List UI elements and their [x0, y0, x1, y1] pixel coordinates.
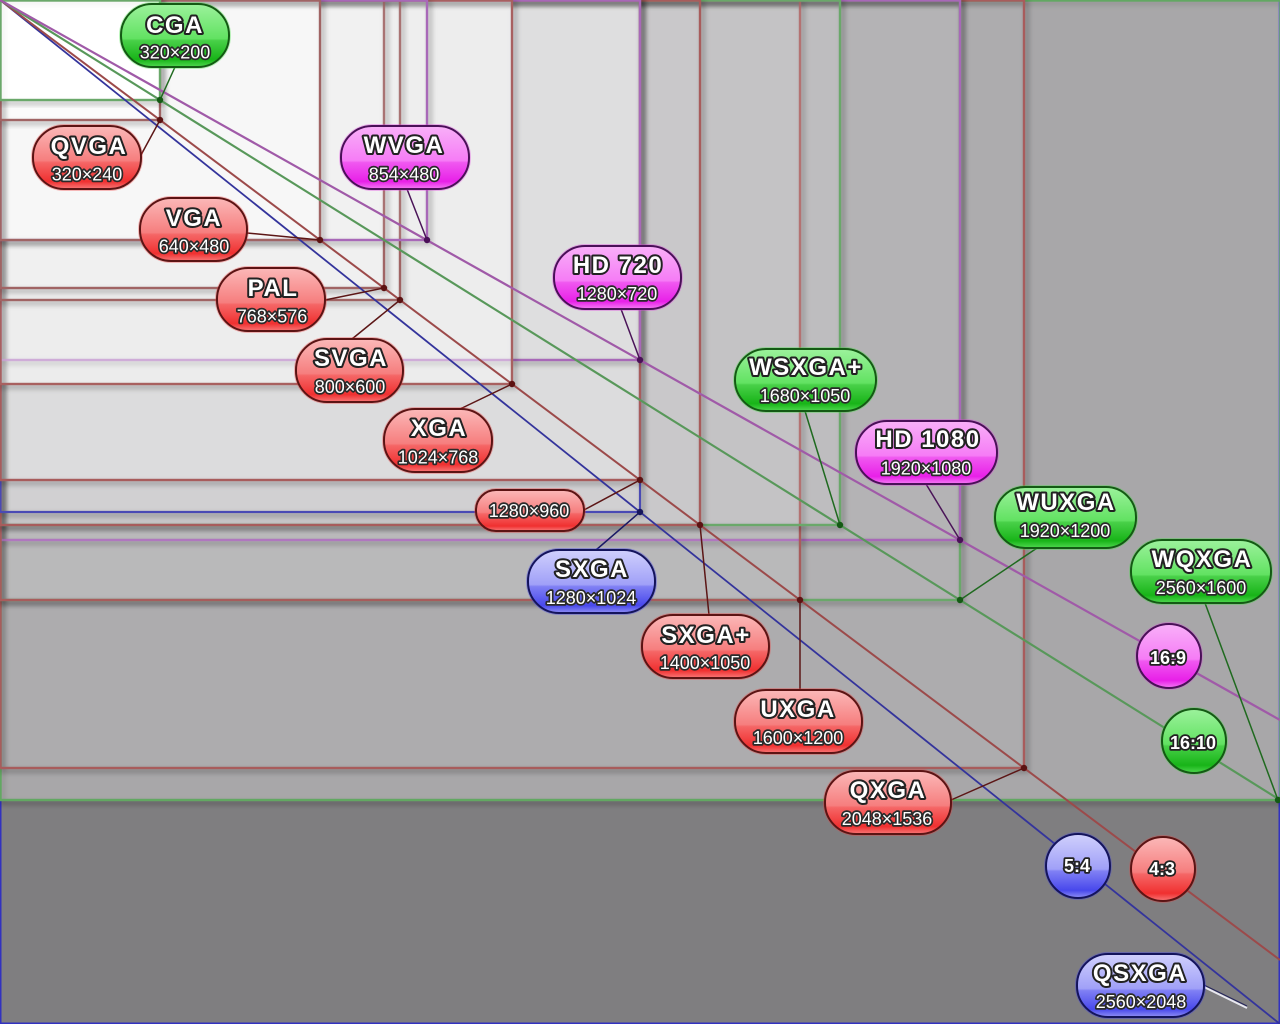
frame: WQXGA 2560×1600	[0, 0, 1280, 803]
frame: PAL 768×576	[0, 0, 387, 291]
label: HD 1080: 1920×1080	[881, 458, 971, 478]
leader: QVGA	[141, 117, 163, 155]
frame: QXGA 2048×1536	[0, 0, 1027, 771]
label: QVGA: 320×240	[52, 164, 122, 184]
leader: PAL	[325, 285, 387, 300]
label: SXGA: SXGA	[555, 556, 629, 583]
label: QVGA	[31, 124, 143, 191]
label: SXGA+	[640, 613, 771, 680]
label: UXGA: 1600×1200	[753, 728, 843, 748]
label: PAL	[215, 266, 327, 333]
label: WSXGA+: 1680×1050	[760, 386, 850, 406]
frame: VGA 640×480	[0, 0, 323, 243]
ratio badge: 16:10: 16:10	[1170, 733, 1216, 753]
label: UXGA: UXGA	[760, 696, 836, 723]
label: QXGA	[823, 769, 953, 836]
label: CGA: CGA	[146, 12, 204, 39]
label: CGA: 320×200	[140, 42, 210, 62]
leader: HD 1080	[926, 484, 963, 543]
label: SXGA	[526, 548, 657, 615]
label: HD 720: 1280×720	[577, 284, 657, 304]
leader: WSXGA+	[805, 411, 843, 528]
ratio badge: 4:3: 4:3	[1149, 859, 1175, 879]
label: QVGA: QVGA	[51, 133, 127, 160]
label: SVGA: 800×600	[315, 377, 385, 397]
ratio badge: 5:4: 5:4	[1064, 856, 1090, 876]
label: SVGA	[294, 337, 405, 404]
ratio badge: 16:9: 16:9	[1150, 648, 1186, 668]
ratio badge: 4:3	[1129, 835, 1197, 903]
label: 1280×960: 1280×960	[489, 501, 569, 521]
label: WVGA: WVGA	[364, 132, 444, 159]
frame: SXGA 1280×1024	[0, 0, 643, 515]
leader: SXGA+	[697, 522, 709, 615]
label: XGA	[382, 407, 494, 474]
label: UXGA	[733, 688, 864, 755]
leader: QSXGA	[1204, 985, 1247, 1008]
frame: WVGA 854×480	[0, 0, 430, 243]
label: HD 1080	[854, 419, 999, 486]
frame: WSXGA+ 1680×1050	[0, 0, 843, 528]
label: WUXGA: WUXGA	[1016, 489, 1116, 516]
label: VGA	[138, 196, 249, 263]
leader: CGA	[157, 67, 175, 103]
leader: WQXGA	[1205, 603, 1280, 803]
label: WQXGA: WQXGA	[1152, 546, 1252, 573]
label: SXGA+: SXGA+	[661, 622, 751, 649]
frame: WUXGA 1920×1200	[0, 0, 963, 603]
label: WSXGA+	[733, 347, 878, 413]
leader: QXGA	[951, 765, 1027, 800]
leader: SVGA	[352, 297, 403, 339]
label: VGA: VGA	[166, 205, 222, 232]
frame: SXGA+ 1400×1050	[0, 0, 703, 528]
frame: SVGA 800×600	[0, 0, 403, 303]
label: PAL: 768×576	[237, 306, 307, 326]
leader: HD 720	[621, 309, 643, 363]
frame: UXGA 1600×1200	[0, 0, 803, 603]
frame: HD 1080 1920×1080	[0, 0, 963, 543]
label: HD 1080: HD 1080	[875, 426, 981, 453]
leader: WUXGA	[957, 546, 1040, 603]
label: HD 720	[552, 244, 683, 311]
frame: 1280×960	[0, 0, 643, 483]
label: HD 720: HD 720	[573, 252, 663, 279]
leader: XGA	[460, 381, 515, 409]
label: CGA	[119, 2, 231, 69]
leader: UXGA	[797, 597, 803, 690]
label: SXGA+: 1400×1050	[660, 653, 750, 673]
label: 1280×960	[474, 488, 586, 533]
label: XGA: 1024×768	[398, 448, 478, 468]
label: QSXGA	[1075, 952, 1206, 1019]
label: SVGA: SVGA	[314, 345, 388, 372]
label: QSXGA: 2560×2048	[1096, 992, 1186, 1012]
label: QXGA: 2048×1536	[842, 809, 932, 829]
frame: QVGA 320×240	[0, 0, 163, 123]
frame: CGA 320×200	[0, 0, 163, 103]
label: WUXGA: 1920×1200	[1020, 521, 1110, 541]
frame: XGA 1024×768	[0, 0, 515, 387]
frame: HD 720 1280×720	[0, 0, 643, 363]
label: WVGA	[339, 124, 471, 191]
label: PAL: PAL	[248, 275, 298, 302]
label: WQXGA: 2560×1600	[1156, 578, 1246, 598]
diagonal line: 16:9 ratio	[0, 0, 1280, 720]
ratio badge: 16:9	[1135, 622, 1203, 690]
label: VGA: 640×480	[159, 236, 229, 256]
label: WVGA: 854×480	[369, 164, 439, 184]
label: XGA: XGA	[411, 415, 467, 442]
label: WQXGA	[1129, 538, 1273, 605]
leader: WVGA	[407, 189, 430, 243]
ratio badge: 16:10	[1160, 707, 1228, 775]
label: QSXGA: QSXGA	[1093, 960, 1187, 987]
leader: 1280×960	[584, 477, 643, 510]
label: WUXGA	[993, 485, 1138, 550]
label: SXGA: 1280×1024	[546, 588, 636, 608]
label: QXGA: QXGA	[850, 777, 926, 804]
leader: VGA	[247, 233, 323, 243]
ratio badge: 5:4	[1044, 832, 1112, 900]
label: WSXGA+: WSXGA+	[749, 354, 863, 381]
leader: SXGA	[596, 509, 643, 550]
diagonal line: 16:10 ratio	[0, 0, 1280, 800]
